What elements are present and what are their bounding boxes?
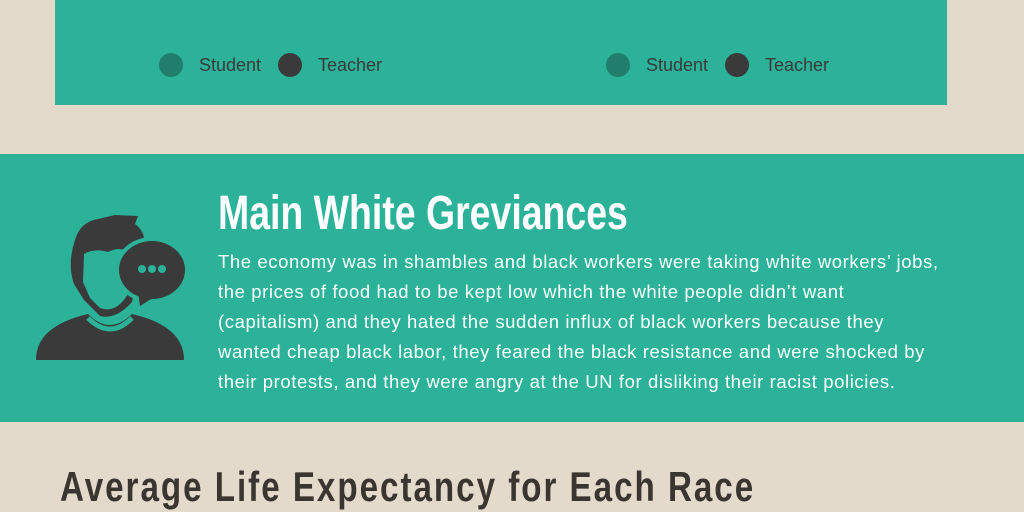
legend left: Teacher (318, 55, 382, 75)
legend right (606, 53, 829, 77)
legend right: Student (646, 55, 708, 75)
body text: (capitalism) and they hated the sudden influx of black workers because they (218, 311, 884, 332)
legend right: Teacher (765, 55, 829, 75)
heading: life expectancy: Average Life Expectancy for Each Race (60, 463, 755, 510)
body text: their protests, and they were angry at the UN for disliking their racist policies. (218, 371, 895, 392)
legend left (159, 53, 382, 77)
body text: the prices of food had to be kept low which the white people didn’t want (218, 281, 844, 302)
heading: Main White Greviances (218, 187, 628, 240)
panel: main white grievances (0, 154, 1024, 422)
body text: wanted cheap black labor, they feared the black resistance and were shocked by (218, 341, 925, 362)
panel: top chart legend area (55, 0, 947, 105)
body text: The economy was in shambles and black workers were taking white workers’ jobs, (218, 251, 939, 272)
body text (218, 251, 939, 392)
icon: person with speech bubble (36, 215, 185, 360)
legend left: Student (199, 55, 261, 75)
